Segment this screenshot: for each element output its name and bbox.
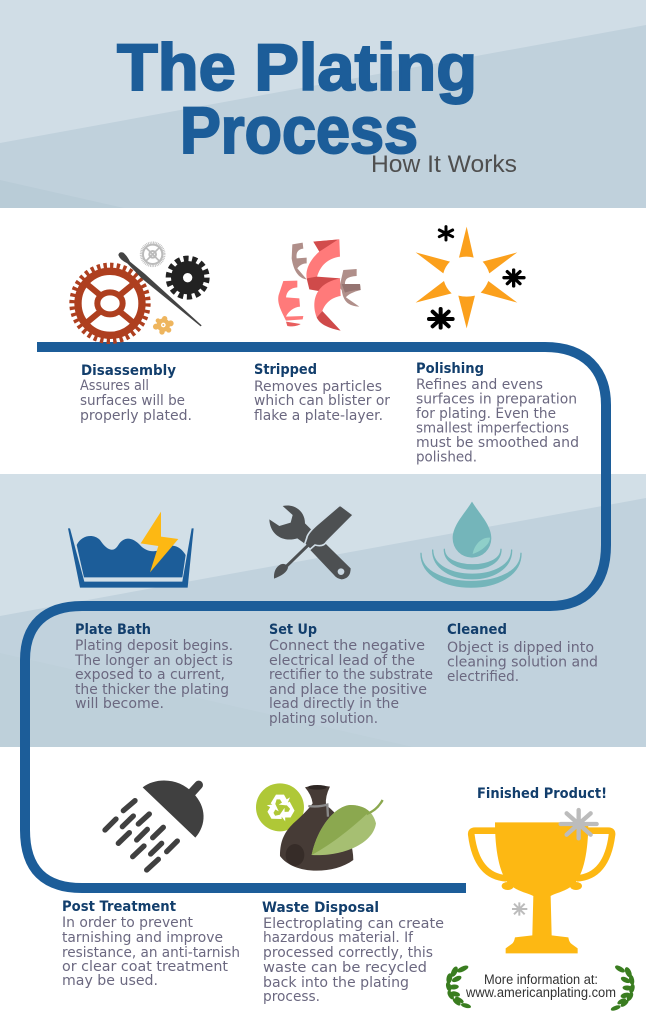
title: Process <box>180 93 418 167</box>
body text <box>74 638 233 712</box>
heading: Set Up <box>269 622 317 638</box>
body text: processed correctly, this <box>263 945 433 961</box>
body text: may be used. <box>62 973 158 989</box>
heading: Plate Bath <box>75 622 151 638</box>
body text: Plating deposit begins. <box>75 638 233 654</box>
body text: Refines and evens <box>416 377 543 393</box>
step: Cleaned <box>421 502 598 685</box>
body text: lead directly in the <box>269 696 399 712</box>
step: Polishing <box>416 227 579 466</box>
panel: middle band background <box>0 474 646 747</box>
heading: Cleaned <box>447 622 507 638</box>
step: Disassembly <box>72 243 207 424</box>
body text <box>269 638 433 727</box>
title: The Plating <box>117 30 477 104</box>
icon: waste bag, recycling badge and leaf <box>256 783 383 871</box>
body text: surfaces will be <box>80 393 185 409</box>
body text: Object is dipped into <box>447 640 594 656</box>
body text: flake a plate-layer. <box>254 408 383 424</box>
icon: gears and screwdriver <box>72 243 207 341</box>
process path line <box>25 347 606 888</box>
body text <box>62 915 240 989</box>
icon: shower head <box>105 780 204 870</box>
step: Waste Disposal <box>256 783 444 1005</box>
step: Finished Product <box>471 786 612 953</box>
body text: cleaning solution and <box>447 654 598 670</box>
body text: back into the plating <box>263 975 409 991</box>
body text: polished. <box>416 450 477 466</box>
body text: which can blister or <box>254 393 390 409</box>
step: Post Treatment <box>62 780 240 989</box>
icon: right laurel <box>611 965 635 1011</box>
body text: Connect the negative <box>269 638 425 654</box>
body text: Removes particles <box>254 379 382 395</box>
body text: In order to prevent <box>62 915 194 931</box>
icon: wrench and screwdriver <box>269 505 353 579</box>
heading: Waste Disposal <box>262 900 379 916</box>
body text: Assures all <box>80 378 149 394</box>
body text <box>254 379 390 424</box>
more information block <box>446 965 635 1011</box>
heading: Disassembly <box>81 363 176 379</box>
icon: left laurel <box>446 965 471 1008</box>
body text: properly plated. <box>80 408 192 424</box>
body text <box>80 378 192 424</box>
body text: Electroplating can create <box>263 916 444 932</box>
body text: resistance, an anti-tarnish <box>62 945 240 961</box>
icon: trophy <box>471 810 612 953</box>
step: Plate Bath <box>68 512 233 712</box>
body text: The longer an object is <box>74 653 233 669</box>
icon: metal ribbons <box>278 239 361 331</box>
subtitle: How It Works <box>371 151 517 178</box>
website text: www.americanplating.com <box>465 985 616 1000</box>
website text <box>465 972 616 1000</box>
heading: Stripped <box>254 362 317 378</box>
body text: must be smoothed and <box>416 435 579 451</box>
body text: hazardous material. If <box>263 930 414 946</box>
title <box>117 30 477 167</box>
body text <box>447 640 598 685</box>
body text: and place the positive <box>269 682 427 698</box>
body text: will become. <box>75 696 164 712</box>
body text: plating solution. <box>269 711 378 727</box>
heading: Polishing <box>416 361 484 377</box>
body text <box>263 916 444 1005</box>
panel: header background <box>0 0 646 208</box>
body text: or clear coat treatment <box>62 959 229 975</box>
icon: sparkling sun <box>416 227 524 328</box>
heading: Post Treatment <box>62 899 176 915</box>
body text: smallest imperfections <box>416 421 569 437</box>
body text <box>416 377 579 466</box>
body text: for plating. Even the <box>416 406 556 422</box>
body text: electrified. <box>447 669 519 685</box>
body text: process. <box>263 989 320 1005</box>
icon: water drop <box>421 502 521 587</box>
body text: waste can be recycled <box>263 960 427 976</box>
step: Stripped <box>254 239 390 424</box>
icon: plating bath with lightning <box>68 512 194 588</box>
body text: surfaces in preparation <box>416 392 577 408</box>
body text: rectifier to the substrate <box>269 667 433 683</box>
heading: Finished Product! <box>477 786 607 802</box>
body text: exposed to a current, <box>75 667 225 683</box>
body text: the thicker the plating <box>75 682 229 698</box>
body text: electrical lead of the <box>269 653 415 669</box>
body text: tarnishing and improve <box>62 930 223 946</box>
website text: More information at: <box>484 972 598 987</box>
step: Set Up <box>269 505 433 727</box>
